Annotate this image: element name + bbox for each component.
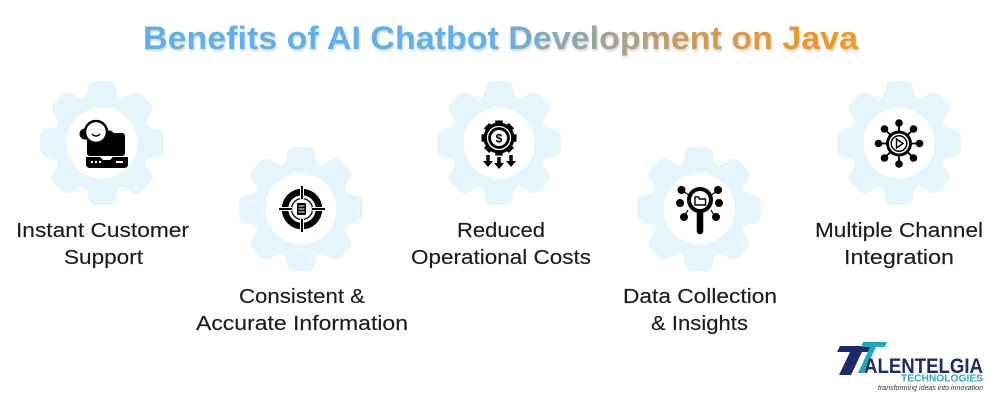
label: Instant Customer (16, 219, 189, 242)
item: Data Collection and Insights (623, 147, 777, 335)
gear background 1 (40, 81, 164, 205)
icon: magnifier with data nodes (676, 186, 723, 231)
icon: dollar gear with down arrows (482, 120, 516, 169)
label: Data Collection (623, 285, 777, 308)
gear background 4 (637, 147, 761, 271)
item: Consistent and Accurate Information (196, 147, 408, 335)
item: Instant Customer Support (16, 81, 189, 269)
gear background 5 (837, 81, 961, 205)
label: Consistent & (239, 285, 365, 308)
label: Reduced (457, 219, 545, 242)
label: & Insights (651, 312, 748, 335)
label: Multiple Channel (815, 219, 983, 242)
logo: Talentelgia Technologies (837, 342, 983, 392)
gear background 2 (239, 147, 363, 271)
label: Operational Costs (411, 246, 591, 269)
logo wordmark: ALENTELGIA (864, 355, 983, 378)
label: Integration (844, 246, 954, 269)
icon: target with document (279, 186, 325, 232)
gear background 3 (437, 81, 561, 205)
logo mark (837, 346, 873, 375)
label: Accurate Information (196, 312, 408, 335)
icon: support agent on laptop (80, 121, 128, 168)
title: Benefits of AI Chatbot Development on Java (143, 20, 858, 56)
label: Support (64, 246, 143, 269)
logo subtitle: TECHNOLOGIES (901, 374, 983, 384)
logo tagline: transforming ideas into innovation (878, 383, 983, 392)
item: Reduced Operational Costs (411, 81, 591, 269)
icon: dollar gear with down arrows: $ (496, 132, 503, 146)
icon: play button hub (875, 119, 923, 168)
item: Multiple Channel Integration (815, 81, 983, 269)
